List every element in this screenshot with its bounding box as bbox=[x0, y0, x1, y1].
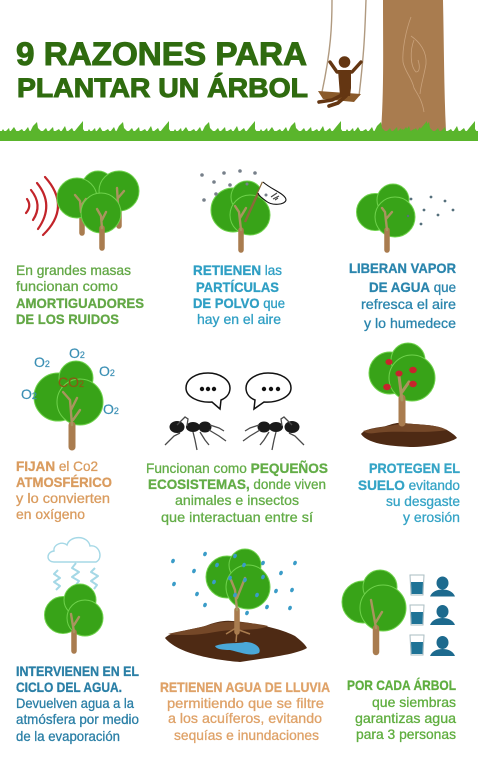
icon: tree catching dust bbox=[200, 169, 286, 250]
icon: tree protecting soil bbox=[361, 343, 457, 447]
text: rain: RETIENEN AGUA DE LLUVIA bbox=[160, 679, 330, 695]
text: water cycle: INTERVIENEN EN EL bbox=[16, 663, 139, 679]
text: water cycle: de la evaporación bbox=[16, 728, 120, 744]
text: rain bbox=[160, 679, 330, 743]
title: 9 RAZONES PARA bbox=[16, 36, 307, 72]
text: ecosystems bbox=[146, 459, 328, 525]
text: CO2: y lo convierten bbox=[16, 490, 110, 506]
icon: tree with CO2 and O2: O2 bbox=[103, 401, 119, 417]
text: noise: funcionan como bbox=[16, 278, 118, 294]
text: water cycle: atmósfera por medio bbox=[16, 711, 139, 727]
text: three people: POR CADA ÁRBOL bbox=[347, 677, 456, 693]
text: three people: para 3 personas bbox=[356, 726, 456, 742]
text: CO2: ATMOSFÉRICO bbox=[16, 474, 112, 490]
text: noise: En grandes masas bbox=[16, 262, 131, 278]
text: three people: que siembras bbox=[372, 694, 456, 710]
icon: tree with CO2 and O2: O2 bbox=[34, 354, 50, 370]
text: rain: sequías e inundaciones bbox=[174, 727, 319, 743]
text: ecosystems: Funcionan como PEQUEÑOS bbox=[146, 459, 328, 476]
text: vapor: LIBERAN VAPOR bbox=[349, 260, 456, 276]
text: water cycle: Devuelven agua a la bbox=[16, 695, 134, 711]
text: vapor: y lo humedece bbox=[364, 315, 456, 331]
text: rain: permitiendo que se filtre bbox=[167, 695, 324, 711]
icon: trees blocking noise bbox=[26, 171, 139, 248]
text: ecosystems: animales e insectos bbox=[175, 492, 299, 508]
text: dust: RETIENEN las bbox=[193, 262, 282, 278]
icon: tree with CO2 and O2: O2 bbox=[99, 363, 115, 379]
icon: rain tree over soil bbox=[165, 549, 307, 662]
text: dust: PARTÍCULAS bbox=[196, 279, 279, 295]
text: dust: DE POLVO que bbox=[193, 295, 285, 311]
text: soil: PROTEGEN EL bbox=[369, 460, 460, 476]
text: noise: AMORTIGUADORES bbox=[16, 295, 144, 311]
text: three people: garantizas agua bbox=[355, 710, 456, 726]
title bbox=[16, 36, 308, 103]
illustration: tree trunk bbox=[381, 0, 446, 131]
text: CO2: FIJAN el Co2 bbox=[16, 458, 98, 474]
icon: water cycle tree bbox=[44, 538, 103, 651]
text: vapor: DE AGUA que bbox=[369, 279, 456, 295]
icon: tree, water glasses and people bbox=[342, 570, 455, 656]
title: PLANTAR UN ÁRBOL bbox=[17, 72, 308, 103]
text: ecosystems: ECOSISTEMAS, donde viven bbox=[148, 476, 326, 492]
text: soil bbox=[358, 460, 460, 525]
illustration: child on swing bbox=[318, 0, 366, 106]
text: ecosystems: que interactuan entre sí bbox=[161, 509, 313, 525]
icon: tree with CO2 and O2: CO2 bbox=[58, 374, 84, 390]
icon: tree with CO2 and O2: O2 bbox=[21, 386, 37, 402]
text: vapor: refresca el aire bbox=[361, 296, 456, 312]
text: noise: DE LOS RUIDOS bbox=[16, 311, 119, 327]
text: rain: a los acuíferos, evitando bbox=[168, 710, 322, 726]
text: vapor bbox=[349, 260, 456, 331]
text: water cycle bbox=[16, 663, 139, 744]
icon: tree with CO2 and O2: O2 bbox=[69, 345, 85, 361]
text: water cycle: CICLO DEL AGUA. bbox=[16, 679, 122, 695]
text: soil: y erosión bbox=[403, 509, 460, 525]
icon: tree releasing vapor bbox=[356, 184, 454, 250]
text: soil: su desgaste bbox=[386, 493, 460, 509]
text: noise bbox=[16, 262, 144, 327]
icon: tree with CO2 and O2 bbox=[21, 345, 119, 447]
text: soil: SUELO evitando bbox=[358, 477, 460, 493]
text: dust bbox=[193, 262, 285, 327]
text: dust: hay en el aire bbox=[197, 311, 281, 327]
grass bbox=[0, 121, 478, 141]
text: CO2: en oxígeno bbox=[16, 506, 85, 522]
text: CO2 bbox=[16, 458, 112, 522]
text: three people bbox=[347, 677, 456, 742]
icon: talking ants bbox=[165, 373, 304, 450]
